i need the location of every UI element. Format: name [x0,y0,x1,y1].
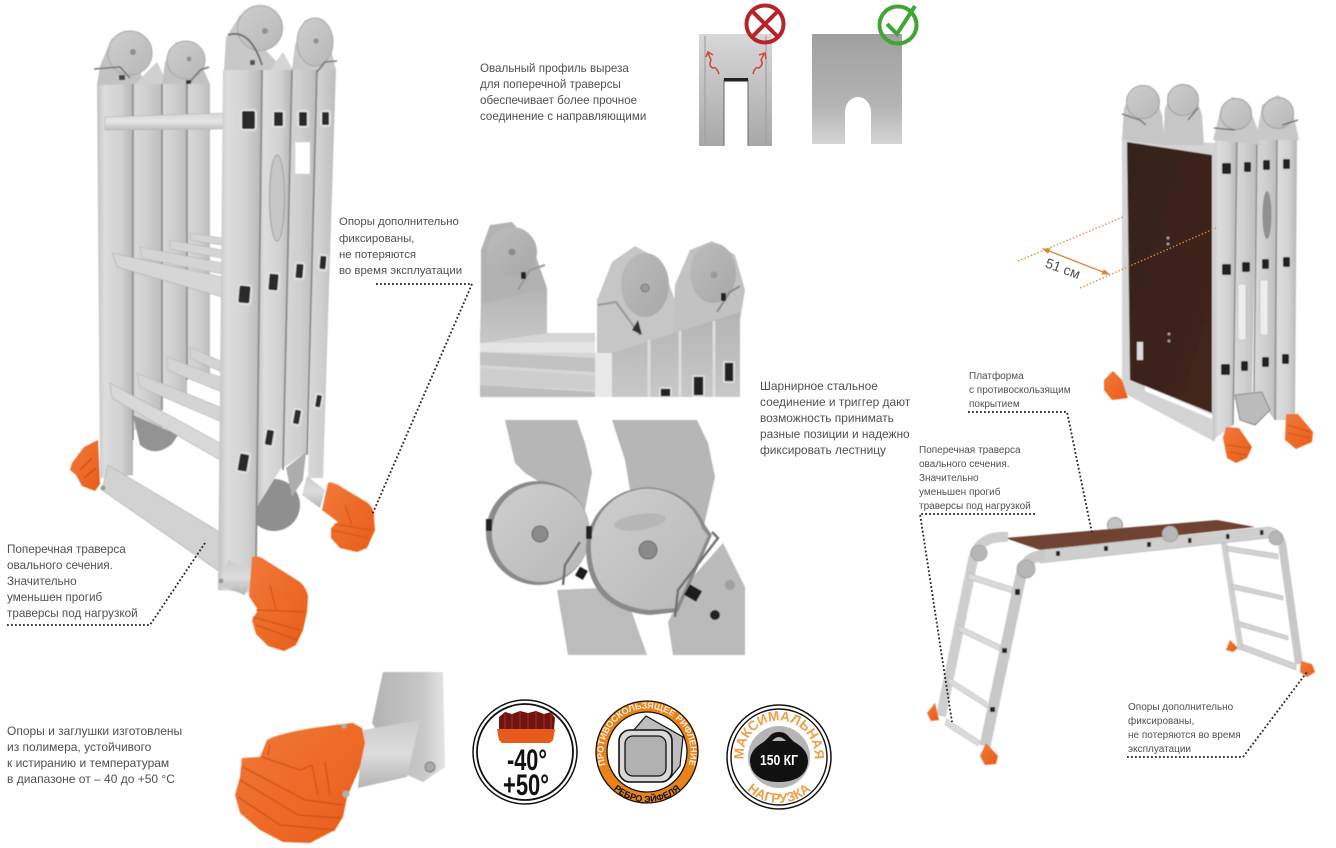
text: crossbar right: уменьшен прогиб [919,486,1001,498]
front rail 2 [257,68,292,507]
lower right arm [668,543,745,655]
bottom rung [102,465,220,572]
lower left arm [557,587,647,655]
rail holes [660,362,734,397]
bolt [425,762,435,772]
text: crossbar: уменьшен прогиб [7,591,102,604]
rail plates [595,312,740,397]
back lower hinge [133,415,178,451]
photo: hinges close-up top [480,222,745,397]
front hinges [224,6,337,72]
text: oval cutout: обеспечивает более прочное [480,94,637,107]
text: hinge: соединение и триггер дают [760,395,911,409]
orange foot: back left [70,440,100,491]
platform board [1005,520,1255,550]
bottom gap [1145,386,1212,419]
text: oval cutout: соединение с направляющими [480,110,646,123]
text: crossbar right: Поперечная траверса [919,445,1021,456]
text: crossbar: Поперечная траверса [7,543,126,556]
leader: left ladder top callout [372,284,472,515]
profile extrusion [633,716,683,777]
left rungs [945,573,1012,746]
photo: hinges close-up bottom [486,420,745,655]
rail grooves [256,68,317,560]
outer frame [1122,138,1215,442]
text: supports fixed: не потеряются [339,249,416,261]
text: polymer feet: из полимера, устойчивого [7,740,152,754]
trigger wire [563,532,718,617]
feet [927,640,1315,765]
text: polymer feet: к истиранию и температурам [7,756,169,770]
orange foot: right [322,482,375,552]
board rivets [1167,237,1170,342]
text: supports right: эксплуатации [1128,744,1191,755]
text: polymer feet: Опоры и заглушки изготовлены [7,724,182,738]
left leg holes [990,589,1020,712]
left disc [486,481,590,585]
arrow [1043,249,1109,274]
text: oval cutout: для поперечной траверсы [480,78,621,91]
low rungs [480,333,595,397]
photo: right folded ladder with platform [1104,84,1313,463]
text: hinge: Шарнирное стальное [760,379,878,393]
text: supports fixed: Опоры дополнительно [339,216,459,228]
badge: temperature [473,700,577,804]
right front leg [1262,532,1299,664]
front lower hinge disc [248,479,300,531]
middle rung [112,253,222,297]
corner hinges [971,526,1283,578]
tread icon [497,711,555,743]
leader: left ladder crossbar callout [7,543,205,625]
leader: crossbar right [920,514,1035,722]
red stress arrows [706,52,766,74]
text: hinge: фиксировать лестницу [760,443,886,457]
upper right arm [612,420,715,530]
text: supports right: не потеряются во время [1128,730,1241,741]
dimension: 51 cm [1018,217,1218,288]
back section rails [97,84,210,478]
text: crossbar: траверсы под нагрузкой [7,607,138,620]
lower rung [110,383,220,460]
badge: max load [726,704,832,810]
orange cap [235,723,365,843]
back hinges [1122,84,1204,145]
text: hinge: разные позиции и надежно [760,427,910,441]
cutout: rectangular profile, wrong [699,34,772,146]
front rail 1 [218,70,262,593]
ridges [238,745,343,830]
minus forty: -40° [507,744,547,777]
plus fifty: +50° [503,769,549,802]
text: polymer feet: в диапазоне от – 40 до +50 °С [7,772,175,786]
far rungs [137,233,222,422]
text: crossbar right: траверсы под нагрузкой [919,501,1031,512]
front rail 3 [283,68,317,468]
right disc [586,487,712,615]
right hinge [673,241,745,340]
profile section [619,730,672,782]
ring text bottom: РЕБРО ЭЙФЕЛЯ [614,784,680,802]
trigger latch [575,567,735,620]
rail holes [1221,159,1290,375]
board sticker [1137,342,1143,360]
lower hinge [1235,392,1270,425]
text: hinge: возможность принимать [760,411,894,425]
left rear leg [941,537,1008,716]
front rail 4 [308,68,336,478]
bottom bolts [100,486,224,584]
left hinge [480,222,547,343]
leader: supports right [1127,672,1307,757]
cap bolts [342,724,350,798]
rail holes [1056,530,1264,556]
text: supports right: фиксированы, [1128,715,1194,727]
text: supports fixed: во время эксплуатации [339,265,462,277]
rail logo [1262,191,1272,239]
text: crossbar right: Значительно [919,473,979,484]
arc text top: МАКСИМАЛЬНАЯ [734,711,824,759]
ring text top: ПРОТИВОСКОЛЬЗЯЩЕЕ РИФЛЕНИЕ [597,702,697,766]
centre hinge [597,246,678,365]
back hinges [94,31,210,85]
load value: 150 КГ [760,752,798,769]
profile hollow [625,736,666,776]
front hinges [1213,95,1299,145]
text: supports fixed: фиксированы, [339,233,414,245]
lower hinge plate [286,452,306,497]
text: platform: покрытием [969,399,1020,410]
upper left arm [505,420,592,510]
foot tubes [218,476,325,595]
photo: close-up orange foot [235,672,445,843]
badge: anti-slip ribbing [595,700,699,804]
arc text bottom: НАГРУЗКА [748,783,811,803]
front rail [1040,527,1278,563]
front rails [1213,140,1297,440]
tube [358,720,420,788]
dimension label: 51 см [1043,255,1083,282]
text: platform: с противоскользящим [969,385,1071,396]
icon: green check circle [880,6,916,44]
grey bracket [372,672,445,782]
feet [1104,371,1313,463]
grey disc [748,726,810,788]
icon: red crossed circle [746,6,784,42]
platform board [1127,142,1212,413]
text: supports right: Опоры дополнительно [1128,702,1233,713]
text: platform: Платформа [969,371,1024,382]
text: oval cutout: Овальный профиль выреза [480,62,629,75]
left front leg [985,556,1045,746]
rail labels [1238,280,1268,340]
kettlebell [750,732,808,782]
sticker [295,142,310,174]
text: crossbar: овального сечения. [7,559,113,572]
cutout: oval profile, correct [812,34,902,144]
photo: unfolded platform ladder [927,518,1315,765]
right rungs [1227,546,1296,670]
square holes [236,110,330,473]
text: crossbar right: овального сечения. [919,459,1010,470]
back hinge on platform [1108,518,1122,532]
oval logo [270,155,284,241]
right rear leg [1224,543,1241,650]
main ladder photo: folded ladder, front view [70,6,375,651]
text: crossbar: Значительно [7,575,77,588]
leader: platform [968,412,1092,533]
top rung [105,113,223,130]
orange foot: front [249,556,308,651]
handle hole [772,737,786,741]
